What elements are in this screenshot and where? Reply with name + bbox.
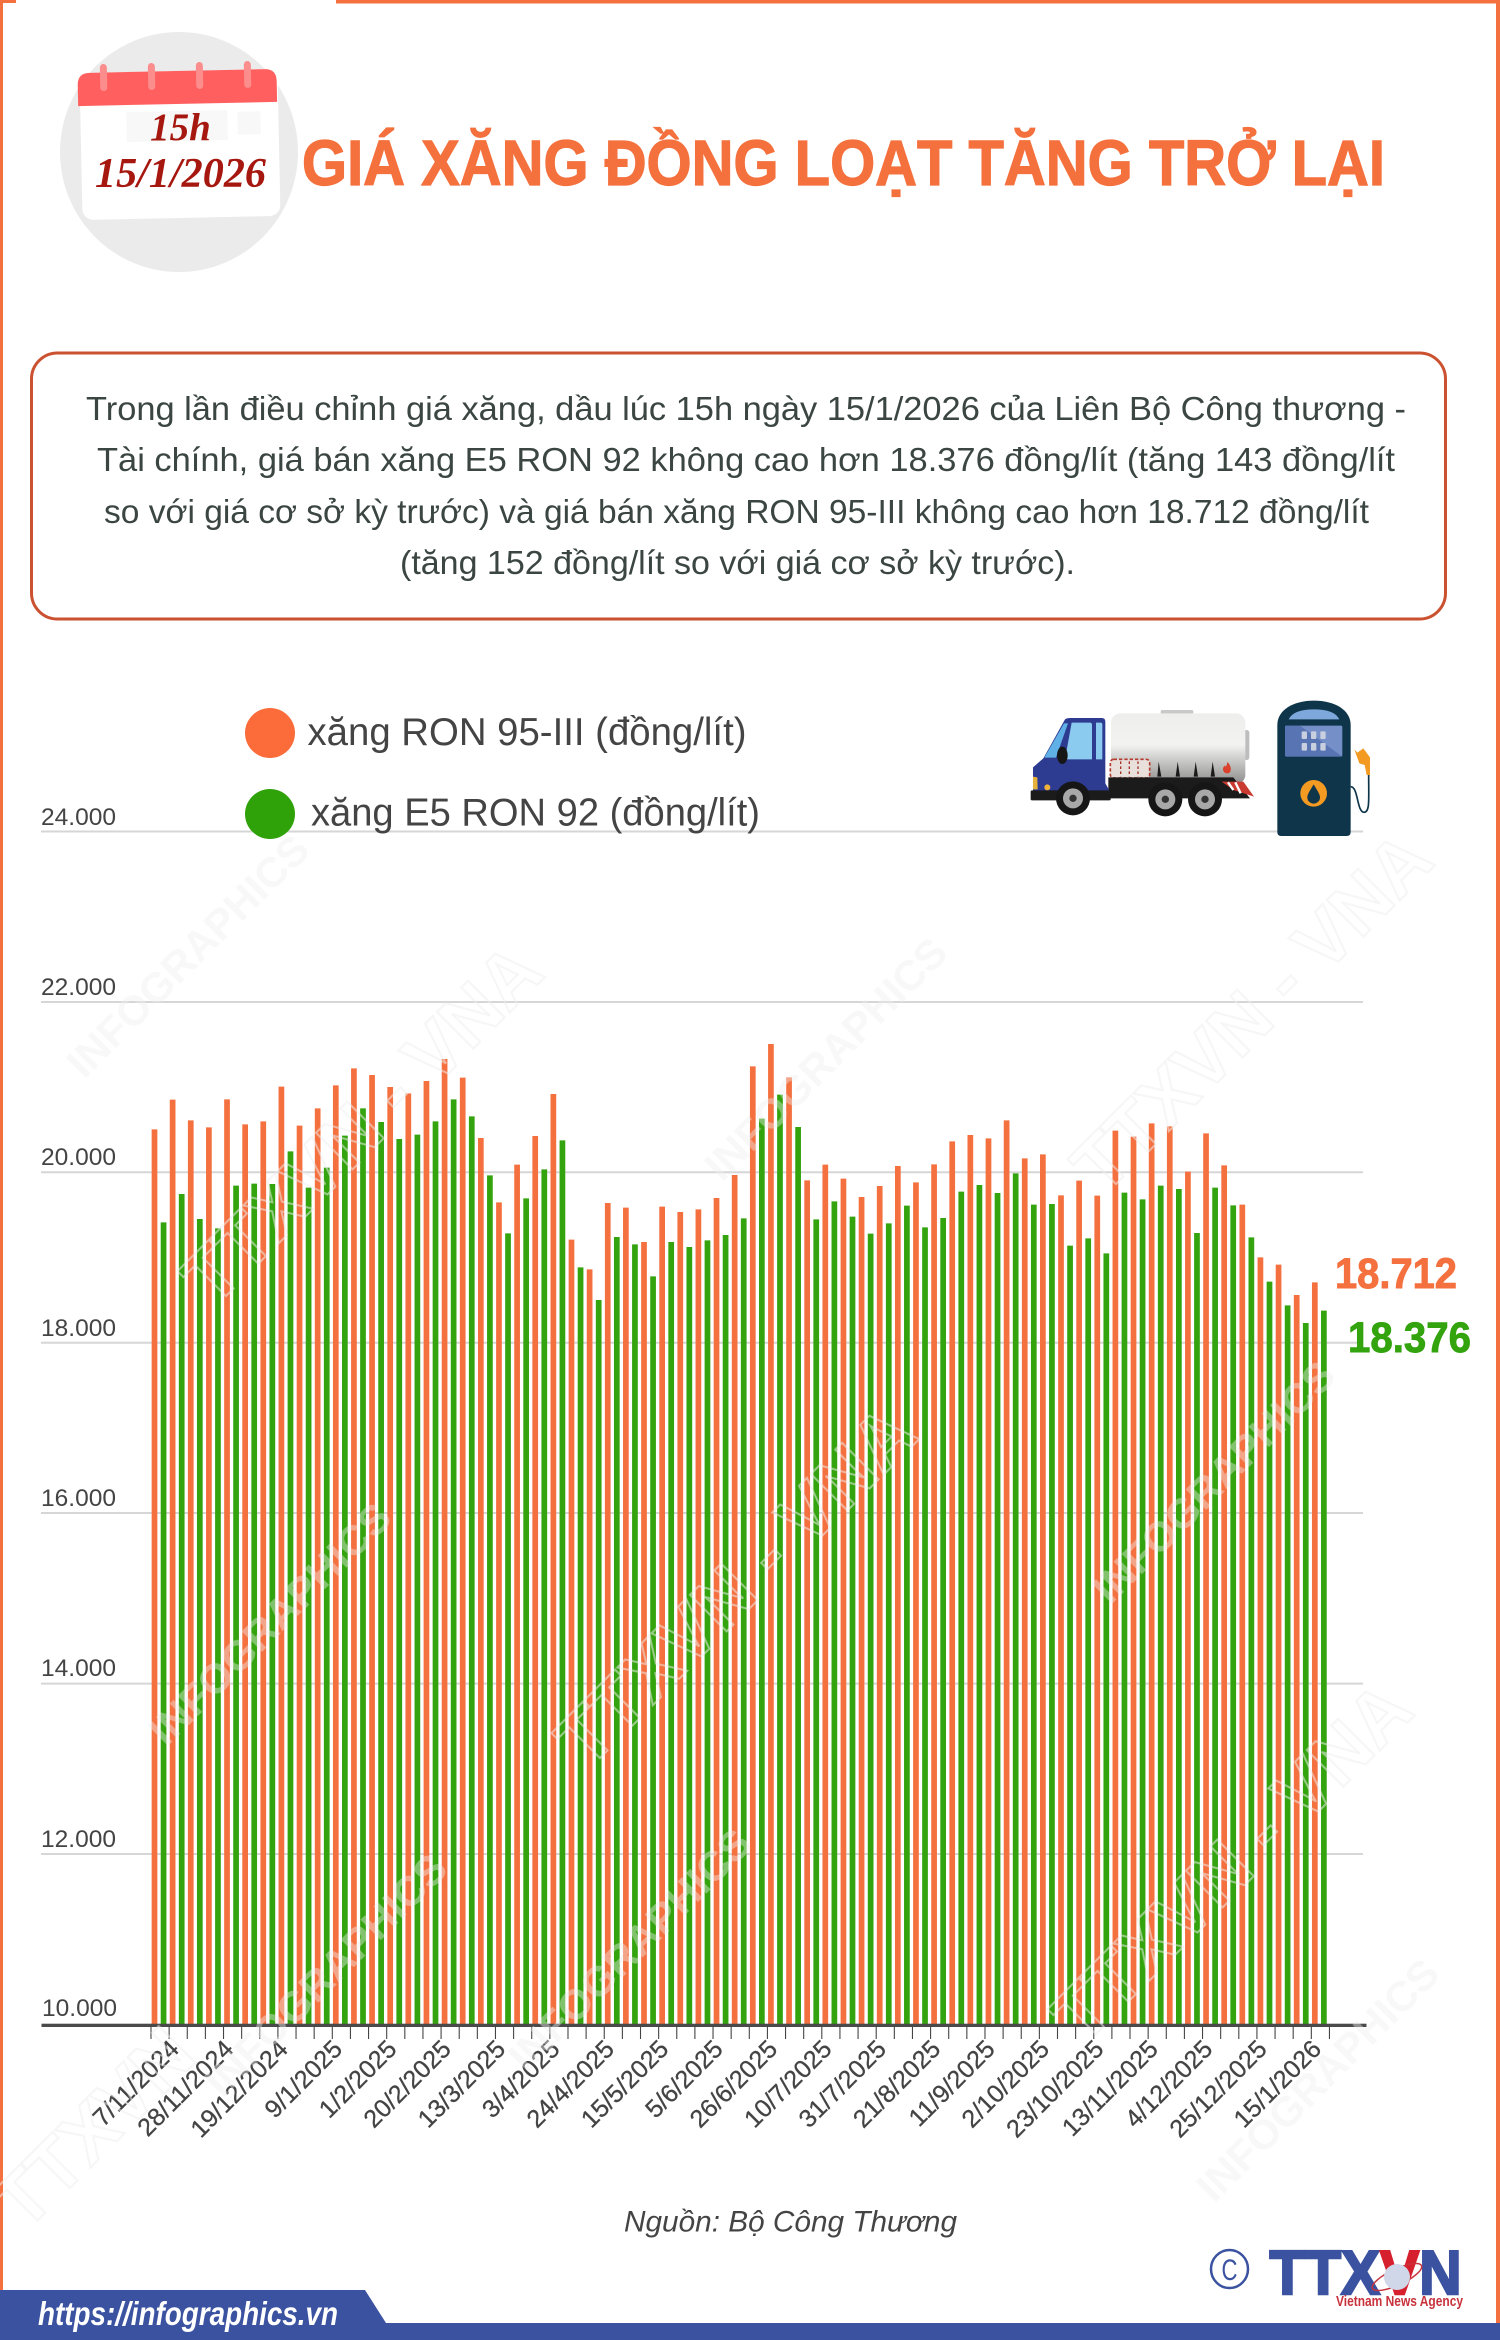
chart: bars RON 95-III and E5 RON 92	[154, 1044, 1324, 2024]
watermarks: INFOGRAPHICS	[195, 1844, 456, 2105]
chart: x axis date labels: 15/1/2026	[1229, 2035, 1327, 2133]
watermarks: INFOGRAPHICS	[139, 1493, 400, 1754]
panel: summary text box	[32, 353, 1446, 619]
chart: x axis date labels: 24/4/2025	[521, 2035, 620, 2133]
logo: TTXVN: C	[1222, 2254, 1238, 2287]
legend	[245, 708, 760, 839]
panel: summary text box: Tài chính, giá bán xăng E5 RON 92 không cao hơn 18.376 đồng/lít (tăng 143 đồng/lít	[97, 441, 1395, 478]
watermarks	[0, 815, 1448, 2244]
chart: x axis date labels: 28/11/2024	[132, 2035, 239, 2142]
chart: y axis labels	[41, 804, 117, 2022]
chart: x axis date labels: 9/1/2025	[259, 2035, 348, 2124]
series: xăng E5 RON 92	[164, 1095, 1324, 2024]
source: Nguồn: Bộ Công Thương	[624, 2206, 957, 2238]
chart: x axis date labels: 21/8/2025	[848, 2035, 946, 2133]
watermarks: TTXVN - VNA	[1035, 1665, 1428, 2058]
watermarks: INFOGRAPHICS	[695, 928, 956, 1189]
chart: y axis labels: 20.000	[41, 1144, 116, 1171]
chart: y axis labels: 16.000	[41, 1485, 116, 1512]
chart: x axis date labels	[88, 2035, 1327, 2143]
chart: x axis date labels: 26/6/2025	[685, 2035, 783, 2133]
legend: xăng RON 95-III (đồng/lít)	[308, 711, 746, 754]
chart: y axis labels: 24.000	[41, 804, 116, 831]
icon: calendar with date	[60, 32, 298, 272]
chart: x axis date labels: 15/5/2025	[576, 2035, 674, 2133]
series: xăng RON 95-III	[154, 1044, 1315, 2024]
chart: x axis date labels: 13/11/2025	[1057, 2035, 1164, 2142]
footer band	[0, 2290, 1500, 2340]
chart: grid lines	[41, 832, 1363, 1854]
callout: E5 RON 92 latest price: 18.376	[1348, 1314, 1471, 1362]
icon: calendar with date: 15/1/2026	[95, 151, 266, 197]
watermarks: TTXVN - VNA	[165, 927, 558, 1320]
panel: summary text box: Trong lần điều chỉnh giá xăng, dầu lúc 15h ngày 15/1/2026 của Liên Bộ Công thương -	[86, 390, 1406, 427]
panel: summary text box: so với giá cơ sở kỳ trước) và giá bán xăng RON 95-III không cao hơn 18.712 đồng/lít	[104, 493, 1369, 530]
chart: x axis date labels: 13/3/2025	[413, 2035, 511, 2133]
chart: y axis labels: 22.000	[41, 974, 116, 1001]
chart: y axis labels: 10.000	[42, 1995, 117, 2022]
chart: x axis date labels: 3/4/2025	[477, 2035, 565, 2124]
chart: x axis date labels: 2/10/2025	[957, 2035, 1055, 2133]
callout: RON 95-III latest price: 18.712	[1335, 1250, 1457, 1298]
chart: x axis date labels: 10/7/2025	[739, 2035, 837, 2133]
chart: x axis date labels: 23/10/2025	[1001, 2035, 1109, 2143]
chart: x axis date labels: 1/2/2025	[314, 2035, 402, 2124]
chart: x axis date labels: 31/7/2025	[793, 2035, 892, 2133]
watermarks: INFOGRAPHICS	[1083, 1351, 1344, 1612]
chart: y axis labels: 12.000	[41, 1826, 116, 1853]
logo: TTXVN: TTXVN	[1270, 2239, 1462, 2308]
chart: x axis date labels: 5/6/2025	[640, 2035, 729, 2124]
chart: x axis date labels: 19/12/2024	[185, 2035, 294, 2143]
chart: y axis labels: 18.000	[41, 1315, 116, 1342]
watermarks: INFOGRAPHICS	[1187, 1949, 1448, 2210]
watermarks: INFOGRAPHICS	[57, 825, 318, 1086]
watermarks: TTXVN - VNA	[539, 1389, 932, 1782]
legend: xăng E5 RON 92 (đồng/lít)	[311, 792, 760, 835]
chart: x axis with ticks	[42, 2024, 1366, 2039]
icon: tanker truck	[1031, 710, 1254, 816]
chart: x axis date labels: 25/12/2025	[1164, 2035, 1273, 2143]
watermarks: TTXVN - VNA	[1055, 815, 1448, 1208]
chart: x axis date labels: 20/2/2025	[358, 2035, 457, 2133]
chart: x axis date labels: 4/12/2025	[1120, 2035, 1218, 2133]
logo: TTXVN: Vietnam News Agency	[1336, 2293, 1464, 2310]
chart: y axis labels: 14.000	[41, 1655, 116, 1682]
icon: calendar with date: 15h	[150, 106, 211, 149]
footer band: https://infographics.vn	[38, 2295, 338, 2332]
chart: x axis date labels: 7/11/2024	[88, 2035, 185, 2132]
icon: fuel pump	[1277, 701, 1370, 836]
watermarks: INFOGRAPHICS	[499, 1819, 760, 2080]
title: GIÁ XĂNG ĐỒNG LOẠT TĂNG TRỞ LẠI	[302, 126, 1385, 199]
chart: x axis date labels: 11/9/2025	[904, 2035, 1001, 2132]
panel: summary text box: (tăng 152 đồng/lít so với giá cơ sở kỳ trước).	[400, 544, 1075, 581]
